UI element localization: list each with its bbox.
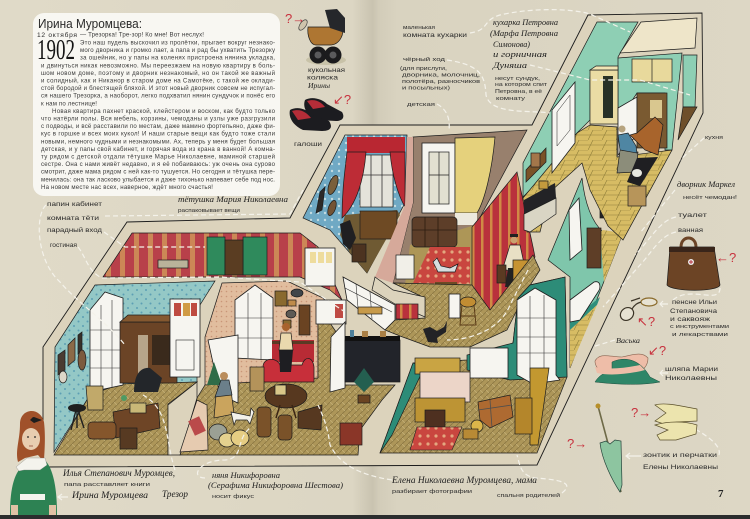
question marks: ↖? (637, 314, 655, 329)
open door with fern (207, 335, 238, 403)
chairs and small table (68, 386, 137, 449)
text labels: right: шляпа Марии (665, 366, 718, 373)
label: doll pram: Ирины (307, 82, 330, 90)
text labels: left: гостиная (50, 242, 77, 249)
label: doll pram: коляска (307, 74, 339, 82)
back room door (618, 93, 667, 155)
text labels: left: комната тёти (47, 215, 100, 222)
diary text lines: что натёрли полы. Вся мебель, корзины, чемоданы и узлы уже разгрузили (41, 116, 275, 122)
room: aunt's room (303, 135, 407, 273)
text labels: top middle: Симонова) (493, 40, 530, 49)
text labels: right: зонтик и перчатки (643, 452, 717, 459)
trunk carried (630, 117, 663, 155)
text labels: right: кухня (705, 135, 723, 141)
white paned far wall (343, 277, 395, 330)
heading: Irina Muromtseva: Ирина Муромцева: (38, 16, 142, 31)
text labels: right: Васька (616, 336, 640, 345)
pantry floor (678, 107, 697, 140)
text labels: left: (Серафима Никифоровна Шестова) (208, 481, 343, 490)
text labels: top middle: Дуняша (492, 61, 527, 70)
text labels: left: носит фикус (212, 494, 254, 500)
text labels: left (47, 194, 343, 500)
luggage bundles (209, 424, 249, 447)
icon: gloves (655, 404, 697, 440)
room: striped corridor wall (472, 172, 535, 310)
icon: doll pram (297, 9, 346, 65)
text labels: left: Илья Степанович Муромцев, (62, 468, 175, 478)
text labels: right: и лекарствами (672, 332, 728, 338)
room: salon (168, 281, 400, 455)
aunt's dresser (360, 211, 397, 239)
aunt figure (340, 220, 356, 250)
text labels: top middle: комната кухарки (403, 33, 467, 39)
nanny with ficus (214, 372, 234, 418)
salon stove (235, 285, 273, 360)
mother's wardrobe (515, 368, 549, 445)
big trunk (412, 217, 457, 247)
porter with suitcases (497, 234, 533, 287)
room: parents' bedroom (380, 277, 567, 453)
black and white cat (423, 321, 447, 343)
text labels: top middle: (для прислуги, (400, 66, 447, 72)
round table and chairs (250, 367, 362, 445)
text labels: left: Трезор (162, 489, 188, 499)
text labels: right: с инструментами (670, 324, 729, 330)
text labels: right: и саквояж (670, 316, 711, 323)
question marks: ?→ (567, 436, 587, 451)
text labels: right: несёт чемодан! (683, 195, 737, 201)
text labels: top middle: несут сундук, (495, 76, 540, 82)
toy horse (433, 258, 458, 285)
striped block under partition (396, 304, 418, 319)
palm on stand (354, 368, 374, 403)
bedroom door (470, 348, 508, 378)
wall pictures (58, 332, 86, 383)
text labels: left: папин кабинет (47, 201, 102, 208)
bathroom door (569, 198, 582, 260)
hat box (463, 420, 483, 439)
room: central corridor (343, 255, 540, 347)
room: father's study (54, 281, 215, 455)
question marks: ↙? (333, 92, 351, 107)
kitchen stove (524, 181, 556, 232)
icon: umbrella (596, 404, 622, 492)
red rug (413, 247, 470, 284)
question marks: ←? (716, 250, 736, 265)
text labels: top middle: Петровна, в её (495, 89, 542, 95)
text labels: left: папа расставляет книги (64, 482, 150, 488)
date (37, 31, 77, 66)
text labels: top middle: полотёра, разносчиков (402, 79, 480, 85)
diary text lines: за ошейник, но у папы на коленях пристроена нянина укладка, (80, 55, 275, 62)
diary text lines: шом новом доме, поэтому и дворник незнакомый, но он такой же важный (41, 70, 275, 77)
diary text lines (41, 32, 276, 191)
double bed (415, 358, 470, 427)
text labels: right: пенсне Ильи (672, 299, 718, 306)
text labels: top middle (400, 18, 558, 108)
diary text lines: Новая квартира пахнет краской, клейстером и воском, как будто только (52, 108, 276, 115)
room: kitchen (523, 18, 697, 240)
text labels: top middle: дворника, молочниц, (402, 72, 481, 78)
text labels: top middle: (Марфа Петровна (490, 29, 558, 38)
wash stand (587, 228, 601, 268)
diary text lines: стой бородой и блестящей бляхой. И этот новый дворник совсем не испугал- (41, 85, 275, 92)
diary text lines: Это наш пудель выскочил из пролётки, прыгает вокруг незнако- (80, 40, 275, 46)
diary text lines: кус в горшке и всех моих кукол! И наши старые вещи как будто тоже стали (41, 131, 275, 138)
bedroom rug (410, 427, 462, 450)
kitchen table (627, 157, 658, 206)
text labels: right: туалет (678, 213, 707, 219)
bath tub (570, 282, 600, 322)
text labels: left: Ирина Муромцева (71, 490, 149, 500)
house outline walls (43, 13, 703, 467)
question marks (285, 11, 736, 451)
date: 1902 (37, 35, 75, 66)
icon: doctor's bag (667, 238, 720, 290)
text labels: right: ванная (678, 228, 703, 234)
text labels: top middle: чёрный ход (403, 56, 446, 63)
red curtains (342, 137, 405, 218)
father figure (134, 368, 162, 392)
diary text lines: и солидный, как и Никанор в старом доме на Самотёке, с такой же оклади- (41, 78, 275, 84)
room: nursery (375, 130, 527, 285)
diary text lines: На новом месте нас всех, наверное, ждёт много счастья! (41, 184, 213, 191)
text labels: right: спальня родителей (497, 492, 560, 499)
text labels: right (391, 135, 737, 499)
question marks: ↙? (648, 343, 666, 358)
cream panel (620, 18, 697, 53)
bedroom stove (517, 288, 560, 384)
apartment floor plan (43, 13, 703, 467)
wardrobe (120, 315, 177, 383)
diary text lines: и двинуться никак невозможно. Мы переезжаем на новую квартиру в боль- (41, 62, 275, 69)
aunt's chair (352, 244, 366, 262)
diary text lines: детская, и у папы свой кабинет, и горячая вода из крана в ванной! А комна- (41, 146, 275, 153)
text labels: right: Елены Николаевны (643, 464, 718, 471)
text labels: top middle: детская (407, 102, 435, 108)
diary text lines: мого дворника и громко лает, а папа и рад бы ухватить Трезорку (80, 47, 276, 54)
diary text lines: новыми, немного чудными и незнакомыми. Ах, теперь у меня будет большая (41, 138, 275, 145)
question marks: ?→ (285, 11, 305, 26)
diary text lines: ту рядом с детской отдали тётушке Марье Николаевне, маминой старшей (41, 154, 275, 160)
mint wall (618, 53, 682, 150)
text labels: left: няня Никифоровна (212, 471, 280, 480)
maid (617, 126, 638, 173)
kitchen wardrobe (590, 66, 618, 124)
room: bathroom (548, 178, 623, 368)
desk (113, 395, 160, 438)
figure: Irina girl (10, 411, 57, 515)
room: hall back wall (103, 233, 342, 300)
label: galoshes: галоши (294, 141, 323, 148)
page number: 7 (718, 488, 724, 500)
tiled stove (90, 292, 123, 392)
diary text lines: — Трезорка! Тре-зор! Ко мне! Вот неслух! (80, 32, 204, 38)
white child bed (396, 255, 414, 279)
date: 12 октября (37, 31, 77, 39)
panel: diary text (33, 13, 280, 196)
small partition bench (168, 382, 208, 455)
icon: Maria's hat (595, 354, 660, 384)
text labels: right: дворник Маркел (677, 180, 735, 189)
text labels: right: Елена Николаевна Муромцева, мама (391, 475, 538, 485)
cream wall cupboard (632, 59, 672, 82)
diary text lines: с подводы, и всё расставили по местам, даже мамино фортепьяно, даже фи- (41, 123, 275, 130)
text labels: top middle: комнату (496, 96, 525, 102)
right mint wall (683, 55, 697, 107)
wall portraits (316, 174, 340, 217)
white bedding (455, 213, 477, 225)
text labels: right: разбирает фотографии (392, 489, 472, 495)
text labels: left: распаковывает вещи (178, 208, 240, 214)
text labels: left: парадный вход (47, 227, 102, 234)
text labels: top middle: и посыльных) (402, 86, 450, 92)
yellow curtain (455, 137, 495, 213)
study door (170, 299, 200, 377)
travel chest (478, 395, 513, 428)
icon: galoshes (290, 98, 343, 131)
kitchen white door (552, 82, 575, 173)
diary text lines: смотрит, даже мама рядом с ней как-то тушуется. Но сегодня и тётушка пере- (41, 169, 275, 176)
white dog (231, 408, 254, 425)
wall pictures (275, 289, 310, 335)
bottom scan edge (0, 515, 750, 519)
diary text lines: ся нашего Трезорка, а наоборот, легко подхватил нянин сундучок и понёс его (41, 93, 276, 100)
icon: pince-nez (618, 298, 657, 323)
text labels: top middle: и горничная (493, 50, 547, 59)
salon right door (316, 300, 346, 392)
shelf with pots (526, 148, 546, 182)
piano (345, 330, 400, 382)
text labels: top middle: маленькая (403, 25, 435, 31)
diary text lines: сестре. Она с нами живёт недавно, и я её побаиваюсь: уж очень она сурово (41, 161, 276, 168)
text labels: top middle: кухарка Петровна (493, 18, 558, 27)
corridor partition (372, 277, 425, 317)
label: doll pram (307, 67, 345, 90)
side table (449, 294, 476, 325)
text labels: left: тётушка Мария Николаевна (178, 194, 288, 204)
diary text lines: к нам по лестнице! (41, 100, 97, 107)
bathroom table (600, 204, 616, 218)
text labels: top middle: на котором спит (495, 82, 547, 88)
diary text lines: менилась: она так ласково улыбается и даже тихонько напевает себе под нос. (41, 176, 275, 183)
question marks: ?→ (631, 405, 651, 420)
label: doll pram: кукольная (308, 67, 345, 74)
red sofa and woman (263, 323, 314, 382)
text labels: right: Степановича (670, 308, 718, 315)
text labels: right: Николаевны (665, 375, 717, 382)
